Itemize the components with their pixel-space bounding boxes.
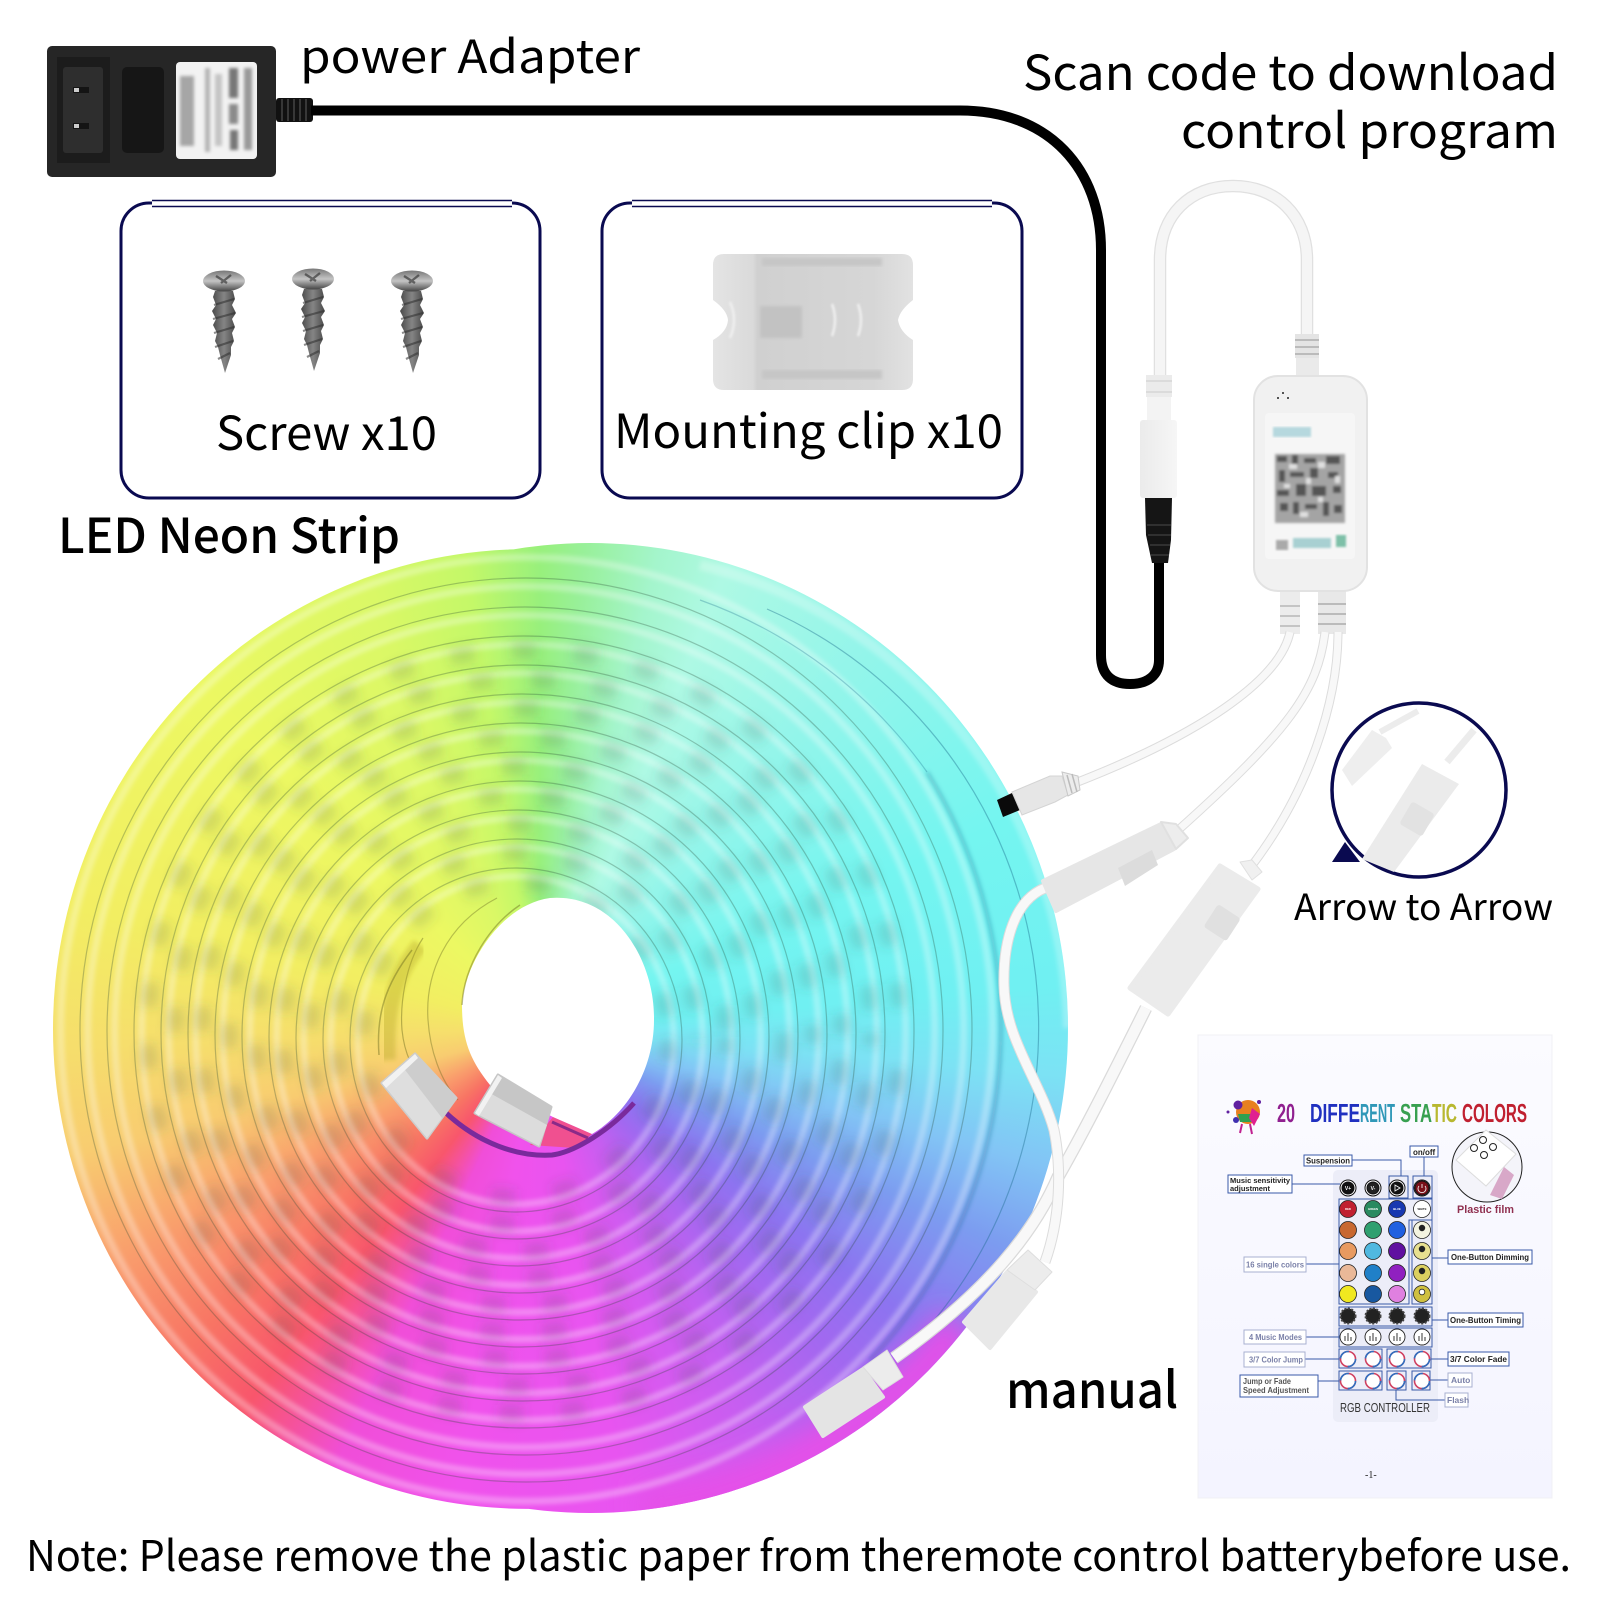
icon: screw 3 xyxy=(391,270,433,373)
callout: one-button dimming: One-Button Dimming xyxy=(1451,1252,1529,1262)
controller box xyxy=(1254,376,1367,591)
end cap 2 xyxy=(475,1075,551,1146)
remote control xyxy=(1333,1170,1438,1422)
centre hole xyxy=(462,898,654,1134)
button captions: GREEN xyxy=(1368,1207,1378,1211)
certification marks xyxy=(1276,535,1346,550)
LED spots xyxy=(148,650,900,1414)
manual heading: 20 xyxy=(1277,1098,1295,1128)
power adapter xyxy=(47,46,313,177)
app logo xyxy=(1273,427,1311,437)
timing buttons xyxy=(1340,1308,1430,1324)
callout: auto: Auto xyxy=(1451,1375,1470,1385)
label: clip: Mounting clip x10 xyxy=(614,393,1003,462)
connector: plug with tab xyxy=(1043,822,1188,911)
label: scan code: Scan code to download xyxy=(1023,34,1558,104)
top button glyphs xyxy=(1395,1184,1426,1193)
label: screw: Screw x10 xyxy=(216,395,437,464)
callout: speed adjustment: Jump or Fade xyxy=(1243,1376,1291,1386)
manual heading: STA xyxy=(1400,1098,1432,1128)
LED neon strip coil xyxy=(53,543,1068,1513)
connector: lower plug B xyxy=(964,1250,1052,1348)
music buttons xyxy=(1340,1329,1430,1345)
purple inner wrap xyxy=(445,1103,634,1155)
manual heading: RENT xyxy=(1360,1098,1395,1128)
callout lines xyxy=(1292,1157,1448,1400)
callout: on/off xyxy=(1410,1146,1438,1157)
panel: screws xyxy=(121,199,540,498)
icon: screw 1 xyxy=(203,270,245,373)
top buttons xyxy=(1340,1180,1430,1196)
callout: flash: Flash xyxy=(1447,1395,1469,1405)
callout: colour jump xyxy=(1244,1352,1305,1367)
callout: music sensitivity: Music sensitivity xyxy=(1230,1176,1291,1185)
ring separators xyxy=(80,578,972,1482)
callout: music sensitivity xyxy=(1228,1175,1292,1193)
mode rings xyxy=(1340,1352,1430,1388)
callout: colour fade: 3/7 Color Fade xyxy=(1450,1354,1507,1364)
inset: arrow to arrow circle xyxy=(1332,703,1506,877)
callout: auto xyxy=(1448,1373,1472,1387)
back coil rings xyxy=(700,565,1068,1360)
callout: one-button timing xyxy=(1448,1313,1523,1327)
manual heading: TIC xyxy=(1432,1098,1457,1128)
hole shading xyxy=(462,905,520,1005)
magenta outer wrap xyxy=(640,1325,960,1510)
plastic film label: Plastic film xyxy=(1457,1204,1514,1216)
note: Note: Please remove the plastic paper from theremote control batterybefore use. xyxy=(26,1523,1571,1584)
white loop wire xyxy=(1160,186,1307,375)
callout: 16 single colors: 16 single colors xyxy=(1246,1260,1304,1270)
dimming buttons xyxy=(1414,1222,1430,1302)
panel: manual page xyxy=(1198,1035,1552,1498)
colour buttons xyxy=(1340,1200,1430,1302)
end cap 1 xyxy=(382,1054,456,1138)
rainbow coil body xyxy=(53,543,1068,1513)
barrel connector xyxy=(1140,375,1177,563)
callout: music sensitivity: adjustment xyxy=(1230,1184,1271,1193)
coil ring detail xyxy=(56,552,1068,1512)
callout: speed adjustment xyxy=(1240,1375,1318,1397)
power cable xyxy=(311,110,1159,684)
label: scan code: control program xyxy=(1181,92,1558,162)
controller top strain relief xyxy=(1295,334,1319,376)
wires to connectors xyxy=(894,632,1338,1358)
micro connector xyxy=(997,772,1080,817)
button captions: BLUE xyxy=(1393,1207,1401,1211)
icon: plastic film circle xyxy=(1452,1130,1522,1202)
label: LED neon strip: LED Neon Strip xyxy=(58,497,400,567)
mode rings accent xyxy=(1340,1352,1430,1388)
icon: screw 2 xyxy=(292,268,334,371)
inner coil arcs beside hole xyxy=(378,898,497,1100)
manual heading: DIFFE xyxy=(1310,1098,1360,1128)
callout: flash xyxy=(1445,1393,1469,1407)
callout: one-button dimming xyxy=(1448,1250,1532,1264)
manual heading: COLORS xyxy=(1462,1098,1527,1128)
connector: socket with tab xyxy=(1130,860,1262,1014)
page number: -1- xyxy=(1365,1470,1377,1481)
label: scan code xyxy=(1023,34,1558,162)
icon: clip xyxy=(713,254,913,390)
callout: suspension: Suspension xyxy=(1306,1156,1350,1166)
callout: speed adjustment: Speed Adjustment xyxy=(1243,1385,1309,1395)
label: manual: manual xyxy=(1006,1351,1178,1423)
button captions xyxy=(1345,1186,1427,1211)
callout: one-button timing: One-Button Timing xyxy=(1450,1315,1521,1325)
callout: colour jump: 3/7 Color Jump xyxy=(1249,1354,1303,1364)
QR code xyxy=(1275,454,1345,523)
callout: 4 music modes xyxy=(1244,1330,1306,1344)
connector: lower plug A xyxy=(805,1350,903,1436)
panel: mounting clip xyxy=(602,199,1022,498)
callout: colour fade xyxy=(1448,1352,1509,1366)
controller lower strain reliefs xyxy=(1280,590,1346,634)
manual heading xyxy=(1277,1098,1527,1128)
button captions: RED xyxy=(1345,1207,1351,1211)
callout: 16 single colors xyxy=(1244,1257,1306,1272)
callout: 4 music modes: 4 Music Modes xyxy=(1249,1332,1302,1342)
button captions: V- xyxy=(1371,1186,1376,1192)
icon: colour splat xyxy=(1226,1100,1261,1134)
ring highlights xyxy=(61,557,993,1501)
remote name: RGB CONTROLLER xyxy=(1340,1400,1430,1415)
button captions: V+ xyxy=(1345,1186,1351,1192)
callout: on/off: on/off xyxy=(1413,1148,1436,1157)
label: arrow to arrow: Arrow to Arrow xyxy=(1294,879,1553,931)
button captions: WHITE xyxy=(1417,1207,1427,1211)
label: power adapter: power Adapter xyxy=(300,21,640,87)
